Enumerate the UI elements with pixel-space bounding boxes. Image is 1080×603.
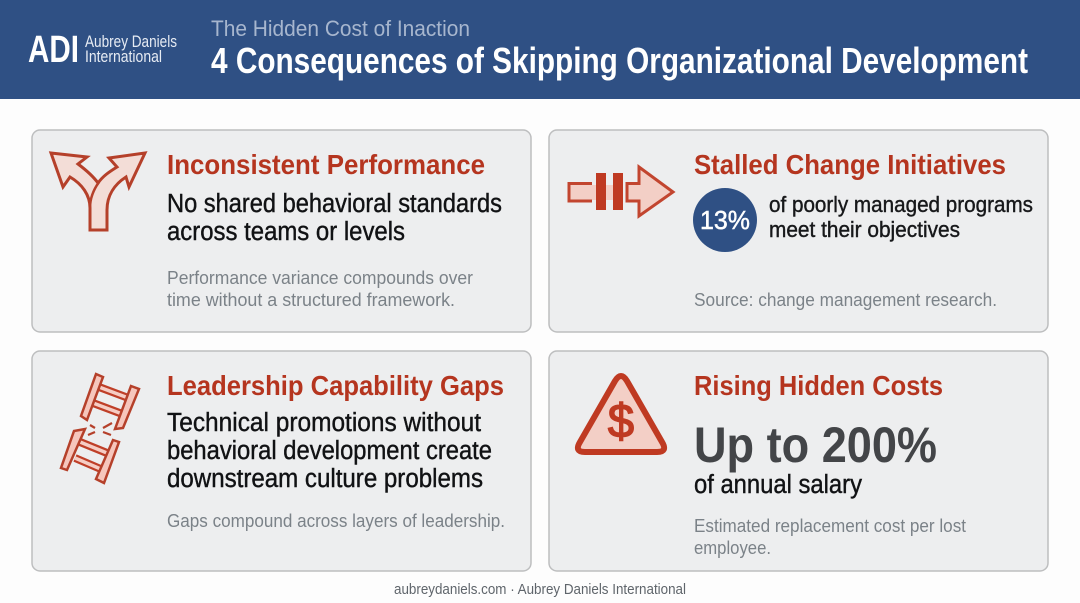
panel: rising hidden costs (549, 351, 1048, 571)
panel: inconsistent performance (32, 130, 531, 332)
statistic description: of annual salary (694, 471, 862, 499)
supporting note: Estimated replacement cost per lost (694, 515, 966, 536)
icon: broken ladder (61, 374, 139, 483)
main statement: Technical promotions without (167, 409, 481, 437)
logo: Aubrey Daniels (85, 32, 177, 51)
main statement: downstream culture problems (167, 465, 483, 493)
main statement: across teams or levels (167, 218, 405, 246)
statistic description: meet their objectives (769, 217, 960, 242)
logo (28, 29, 177, 71)
icon: warning triangle with dollar sign (578, 376, 664, 452)
supporting note (694, 515, 966, 558)
subtitle: The Hidden Cost of Inaction (211, 16, 470, 41)
stat badge: 13% (693, 188, 757, 252)
source note: Source: change management research. (694, 289, 997, 310)
statistic description: of poorly managed programs (769, 192, 1033, 217)
icon: diverging arrows (51, 153, 145, 230)
stat badge: 13%: 13% (700, 205, 750, 235)
heading: Leadership Capability Gaps (167, 370, 504, 401)
supporting note (167, 267, 473, 310)
main statement (167, 190, 502, 246)
main statement: No shared behavioral standards (167, 190, 502, 218)
panel: stalled change initiatives (549, 130, 1048, 332)
big statistic: Up to 200% (694, 417, 937, 473)
main statement: behavioral development create (167, 437, 492, 465)
supporting note: time without a structured framework. (167, 289, 455, 310)
supporting note: employee. (694, 537, 771, 558)
heading: Inconsistent Performance (167, 149, 485, 180)
statistic description (769, 192, 1033, 242)
icon: warning triangle with dollar sign: $ (608, 394, 634, 447)
icon: blocked arrow (569, 167, 673, 216)
logo: International (85, 47, 162, 66)
panel: leadership capability gaps (32, 351, 531, 571)
header band (0, 0, 1080, 99)
footer: aubreydaniels.com · Aubrey Daniels International (394, 582, 686, 598)
heading: Stalled Change Initiatives (694, 149, 1006, 180)
supporting note: Gaps compound across layers of leadership. (167, 510, 505, 531)
logo: ADI (28, 29, 79, 71)
supporting note: Performance variance compounds over (167, 267, 473, 288)
heading: Rising Hidden Costs (694, 370, 943, 401)
main statement (167, 409, 492, 493)
